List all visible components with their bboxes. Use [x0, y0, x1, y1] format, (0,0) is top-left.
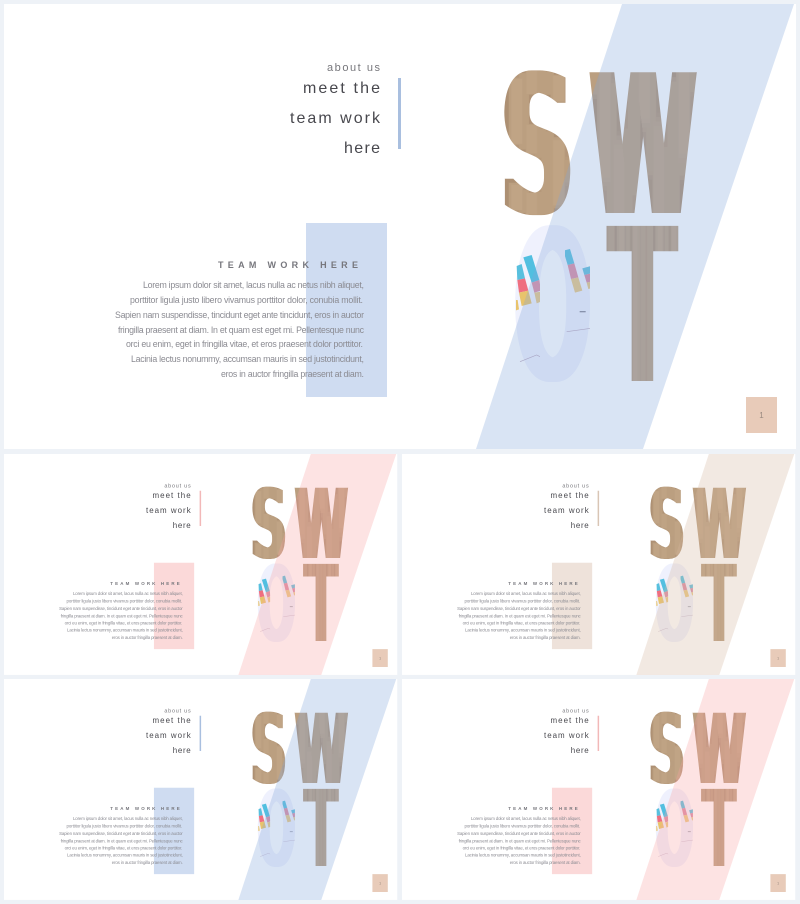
heading block: team work: [290, 110, 381, 127]
body text: [115, 280, 365, 379]
page number badge: [770, 874, 786, 892]
body text: Lacinia lectus nonummy, accumsan mauris in sed justotincidunt,: [465, 853, 581, 858]
subheading: TEAM WORK HERE: [508, 806, 578, 811]
diagonal band: [476, 4, 794, 449]
subheading: TEAM WORK HERE: [218, 260, 358, 270]
SWOT letters with photo fill: S: [501, 32, 574, 263]
body text: orci eu enim, eget in fringilla vitae, et eros praesent dolor porttitor.: [65, 845, 182, 850]
heading block: team work: [544, 731, 589, 740]
body text: eros in auctor fringilla praesent at diam.: [112, 635, 183, 640]
body text: orci eu enim, eget in fringilla vitae, et eros praesent dolor porttitor.: [463, 620, 580, 625]
heading block: here: [173, 746, 191, 755]
heading block: meet the: [550, 716, 589, 725]
body text: Lacinia lectus nonummy, accumsan mauris in sed justotincidunt,: [67, 628, 183, 633]
diagonal band: [636, 454, 794, 675]
SWOT letters with photo fill: T: [701, 542, 737, 670]
heading block: team work: [146, 506, 191, 515]
SWOT letters with photo fill: [252, 486, 348, 642]
slide 4: small blue slide: [4, 679, 397, 900]
SWOT letters with photo fill: O: [257, 544, 296, 667]
accent rectangle: [552, 788, 592, 874]
heading block: meet the: [303, 80, 380, 97]
SWOT letters with photo fill: O: [655, 544, 694, 667]
body text: Lorem ipsum dolor sit amet, lacus nulla ac netus nibh aliquet,: [143, 280, 364, 290]
body text: fringilla praesent at diam. In et quam est eget mi. Pellentesque nunc: [61, 838, 184, 843]
slide 3: cream slide: [402, 454, 795, 675]
SWOT letters with photo fill: T: [303, 767, 339, 895]
body text: fringilla praesent at diam. In et quam est eget mi. Pellentesque nunc: [118, 325, 365, 335]
heading block: about us: [164, 483, 191, 489]
heading block: meet the: [152, 716, 191, 725]
SWOT letters with photo fill: S: [649, 469, 685, 583]
body text: Lacinia lectus nonummy, accumsan mauris in sed justotincidunt,: [131, 354, 364, 364]
page number badge: 1: [777, 656, 780, 661]
body text: Lacinia lectus nonummy, accumsan mauris in sed justotincidunt,: [465, 628, 581, 633]
heading block: here: [571, 521, 589, 530]
accent rectangle: [552, 563, 592, 649]
accent rectangle: [154, 563, 194, 649]
SWOT letters with photo fill: W: [295, 694, 348, 808]
body text: Sapien nam suspendisse, tincidunt eget ante tincidunt, eros in auctor: [115, 310, 364, 320]
subheading: TEAM WORK HERE: [110, 581, 180, 586]
body text: orci eu enim, eget in fringilla vitae, et eros praesent dolor porttitor.: [65, 620, 182, 625]
body text: Lorem ipsum dolor sit amet, lacus nulla ac netus nibh aliquet,: [471, 816, 581, 821]
SWOT letters with photo fill: [650, 712, 746, 867]
body text: fringilla praesent at diam. In et quam est eget mi. Pellentesque nunc: [459, 613, 582, 618]
heading block: meet the: [550, 491, 589, 500]
heading block: here: [173, 521, 191, 530]
body text: [59, 816, 184, 865]
diagonal band: [238, 679, 396, 900]
body text: eros in auctor fringilla praesent at diam.: [112, 860, 183, 865]
SWOT letters with photo fill: W: [295, 469, 348, 583]
SWOT letters with photo fill: O: [514, 183, 592, 432]
body text: Lorem ipsum dolor sit amet, lacus nulla ac netus nibh aliquet,: [73, 591, 183, 596]
page number badge: [746, 397, 777, 433]
accent rectangle: [154, 788, 194, 874]
body text: fringilla praesent at diam. In et quam est eget mi. Pellentesque nunc: [61, 613, 184, 618]
page number badge: 1: [379, 881, 382, 886]
accent bar: [598, 491, 599, 526]
body text: Lorem ipsum dolor sit amet, lacus nulla ac netus nibh aliquet,: [471, 591, 581, 596]
diagonal band: [238, 454, 396, 675]
body text: fringilla praesent at diam. In et quam est eget mi. Pellentesque nunc: [459, 838, 582, 843]
accent bar: [200, 491, 201, 526]
body text: porttitor ligula justo libero vivamus porttitor dolor, conubia mollit.: [465, 598, 580, 603]
body text: [457, 591, 582, 640]
heading block: [544, 708, 589, 755]
slide 1: main blue slide: [4, 4, 796, 449]
body text: eros in auctor fringilla praesent at diam.: [510, 860, 581, 865]
slide 2: pink slide: [4, 454, 397, 675]
heading block: about us: [327, 62, 380, 74]
page number badge: 1: [777, 881, 780, 886]
accent bar: [598, 716, 599, 751]
body text: porttitor ligula justo libero vivamus porttitor dolor, conubia mollit.: [465, 823, 580, 828]
subheading: TEAM WORK HERE: [508, 581, 578, 586]
page number badge: [372, 874, 388, 892]
body text: [457, 816, 582, 865]
page number badge: [372, 649, 388, 667]
body text: orci eu enim, eget in fringilla vitae, et eros praesent dolor porttitor.: [463, 845, 580, 850]
body text: Sapien nam suspendisse, tincidunt eget ante tincidunt, eros in auctor: [457, 831, 581, 836]
heading block: [146, 483, 191, 530]
SWOT letters with photo fill: [504, 70, 697, 382]
SWOT letters with photo fill: W: [693, 469, 746, 583]
heading block: about us: [164, 708, 191, 714]
body text: porttitor ligula justo libero vivamus porttitor dolor, conubia mollit.: [130, 295, 363, 305]
body text: Sapien nam suspendisse, tincidunt eget ante tincidunt, eros in auctor: [457, 606, 581, 611]
SWOT letters with photo fill: T: [303, 542, 339, 670]
heading block: [544, 483, 589, 530]
body text: [59, 591, 184, 640]
heading block: here: [571, 746, 589, 755]
subheading: TEAM WORK HERE: [110, 806, 180, 811]
body text: Sapien nam suspendisse, tincidunt eget ante tincidunt, eros in auctor: [59, 831, 183, 836]
SWOT letters with photo fill: W: [693, 694, 746, 808]
SWOT letters with photo fill: O: [655, 769, 694, 892]
SWOT letters with photo fill: T: [701, 767, 737, 895]
SWOT letters with photo fill: S: [649, 694, 685, 808]
heading block: team work: [146, 731, 191, 740]
page number badge: [770, 649, 786, 667]
body text: porttitor ligula justo libero vivamus porttitor dolor, conubia mollit.: [67, 823, 182, 828]
SWOT letters with photo fill: W: [590, 31, 696, 264]
body text: Lacinia lectus nonummy, accumsan mauris in sed justotincidunt,: [67, 853, 183, 858]
body text: eros in auctor fringilla praesent at diam.: [221, 369, 364, 379]
SWOT letters with photo fill: S: [251, 694, 287, 808]
page number badge: 1: [759, 411, 764, 420]
body text: orci eu enim, eget in fringilla vitae, et eros praesent dolor porttitor.: [126, 339, 363, 349]
heading block: here: [344, 140, 380, 157]
slide 5: second pink slide: [402, 679, 795, 900]
SWOT letters with photo fill: S: [251, 469, 287, 583]
heading block: about us: [562, 483, 589, 489]
body text: porttitor ligula justo libero vivamus porttitor dolor, conubia mollit.: [67, 598, 182, 603]
accent bar: [200, 716, 201, 751]
SWOT letters with photo fill: [252, 712, 348, 867]
heading block: team work: [544, 506, 589, 515]
diagonal band: [636, 679, 794, 900]
body text: Sapien nam suspendisse, tincidunt eget ante tincidunt, eros in auctor: [59, 606, 183, 611]
SWOT letters with photo fill: T: [607, 179, 678, 436]
body text: eros in auctor fringilla praesent at diam.: [510, 635, 581, 640]
accent bar: [398, 78, 401, 149]
page number badge: 1: [379, 656, 382, 661]
heading block: [290, 62, 381, 157]
heading block: [146, 708, 191, 755]
body text: Lorem ipsum dolor sit amet, lacus nulla ac netus nibh aliquet,: [73, 816, 183, 821]
heading block: about us: [562, 708, 589, 714]
heading block: meet the: [152, 491, 191, 500]
SWOT letters with photo fill: O: [257, 769, 296, 892]
accent rectangle: [306, 223, 387, 397]
SWOT letters with photo fill: [650, 486, 746, 642]
